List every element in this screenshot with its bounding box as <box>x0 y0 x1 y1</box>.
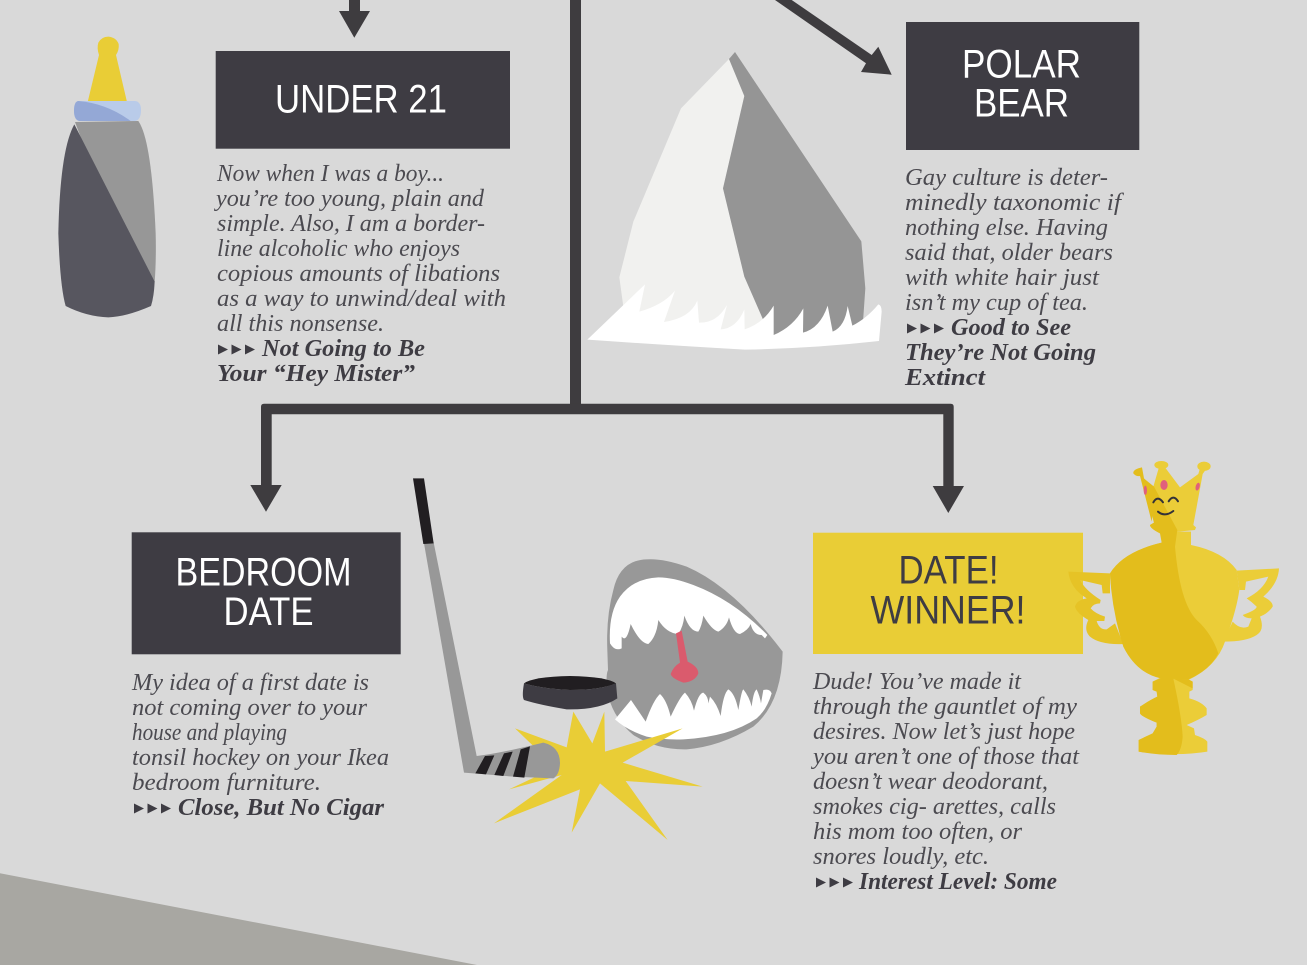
text block: date winner description: desires. Now let’s just hope <box>813 719 1075 745</box>
text block: under 21 description <box>214 161 506 337</box>
heading box: bedroom date: DATE <box>224 590 314 634</box>
text block: date winner description: his mom too often, or <box>813 819 1023 845</box>
impact star <box>494 712 703 840</box>
text block: under 21 description: Now when I was a boy... <box>216 161 444 187</box>
heading box: bedroom date: BEDROOM <box>176 551 352 595</box>
icon: trophy with crown <box>1068 461 1279 755</box>
heading box: polar bear: BEAR <box>974 82 1069 126</box>
trophy cup, stem and crown <box>1110 461 1239 755</box>
panel: under 21 <box>214 51 510 387</box>
crown jewels <box>1144 480 1201 495</box>
verdict: under 21: Your “Hey Mister” <box>217 361 415 387</box>
text block: date winner description <box>811 669 1080 870</box>
icon: polar bear hat <box>587 52 882 350</box>
text block: polar bear description: with white hair just <box>905 265 1100 291</box>
text block: bedroom date description: My idea of a first date is <box>131 670 369 696</box>
text block: date winner description: Dude! You’ve made it <box>812 669 1022 695</box>
text block: date winner description: smokes cig- arettes, calls <box>813 794 1056 820</box>
flow connectors and arrows <box>250 0 964 513</box>
verdict: bedroom date: Close, But No Cigar <box>178 795 385 821</box>
arrow: down to under 21 <box>339 0 370 38</box>
text block: polar bear description: said that, older bears <box>905 240 1113 266</box>
panel: date winner <box>811 533 1083 895</box>
arrow: branch to date winner <box>575 404 964 513</box>
text block: bedroom date description: tonsil hockey on your Ikea <box>132 745 389 771</box>
verdict: date winner: Interest Level: Some <box>858 869 1057 895</box>
panel: polar bear <box>904 22 1139 391</box>
heading box: under 21: UNDER 21 <box>275 78 447 122</box>
icon: baby bottle <box>58 37 156 317</box>
verdict: under 21 <box>217 336 425 387</box>
heading box: polar bear: POLAR <box>962 43 1081 87</box>
verdict: polar bear: Good to See <box>951 315 1071 341</box>
text block: date winner description: doesn’t wear deodorant, <box>813 769 1048 795</box>
text block: under 21 description: copious amounts of libations <box>217 261 500 287</box>
panel: bedroom date <box>131 532 401 821</box>
verdict: polar bear <box>904 315 1096 391</box>
floor wedge <box>0 873 477 965</box>
text block: date winner description: snores loudly, etc. <box>813 844 989 870</box>
text block: under 21 description: all this nonsense. <box>217 311 384 337</box>
connector: main vertical line <box>570 0 581 410</box>
heading box: bedroom date <box>132 532 401 654</box>
text block: under 21 description: line alcoholic who enjoys <box>217 236 460 262</box>
heading box: date winner <box>813 533 1083 654</box>
arrow: branch to bedroom date <box>250 404 575 512</box>
arrow: diagonal to polar bear <box>775 0 892 75</box>
text block: bedroom date description: bedroom furniture. <box>132 770 321 796</box>
heading box: under 21 <box>216 51 510 149</box>
text block: bedroom date description: house and playing <box>132 720 287 746</box>
text block: under 21 description: simple. Also, I am a border- <box>217 211 485 237</box>
text block: bedroom date description: not coming over to your <box>132 695 368 721</box>
heading box: date winner: DATE! <box>898 548 998 592</box>
text block: under 21 description: you’re too young, plain and <box>214 186 485 212</box>
trophy handles <box>1068 568 1279 644</box>
heading box: date winner: WINNER! <box>870 588 1026 632</box>
icon: hockey stick, puck and mouth <box>413 478 783 840</box>
text block: date winner description: you aren’t one of those that <box>811 744 1080 770</box>
text block: under 21 description: as a way to unwind/deal with <box>217 286 506 312</box>
mouth <box>607 559 783 749</box>
text block: polar bear description: isn’t my cup of tea. <box>905 290 1088 316</box>
hockey stick <box>413 478 560 778</box>
text block: polar bear description: minedly taxonomic if <box>905 190 1125 216</box>
verdict: under 21: Not Going to Be <box>261 336 425 362</box>
verdict: polar bear: They’re Not Going <box>905 340 1096 366</box>
text block: polar bear description: Gay culture is deter- <box>905 165 1108 191</box>
heading box: polar bear <box>906 22 1139 150</box>
text block: date winner description: through the gauntlet of my <box>813 694 1077 720</box>
smiling face <box>1153 498 1178 514</box>
text block: polar bear description <box>905 165 1125 316</box>
puck <box>523 676 617 709</box>
verdict: polar bear: Extinct <box>904 365 986 391</box>
text block: bedroom date description <box>131 670 389 796</box>
text block: polar bear description: nothing else. Having <box>905 215 1108 241</box>
